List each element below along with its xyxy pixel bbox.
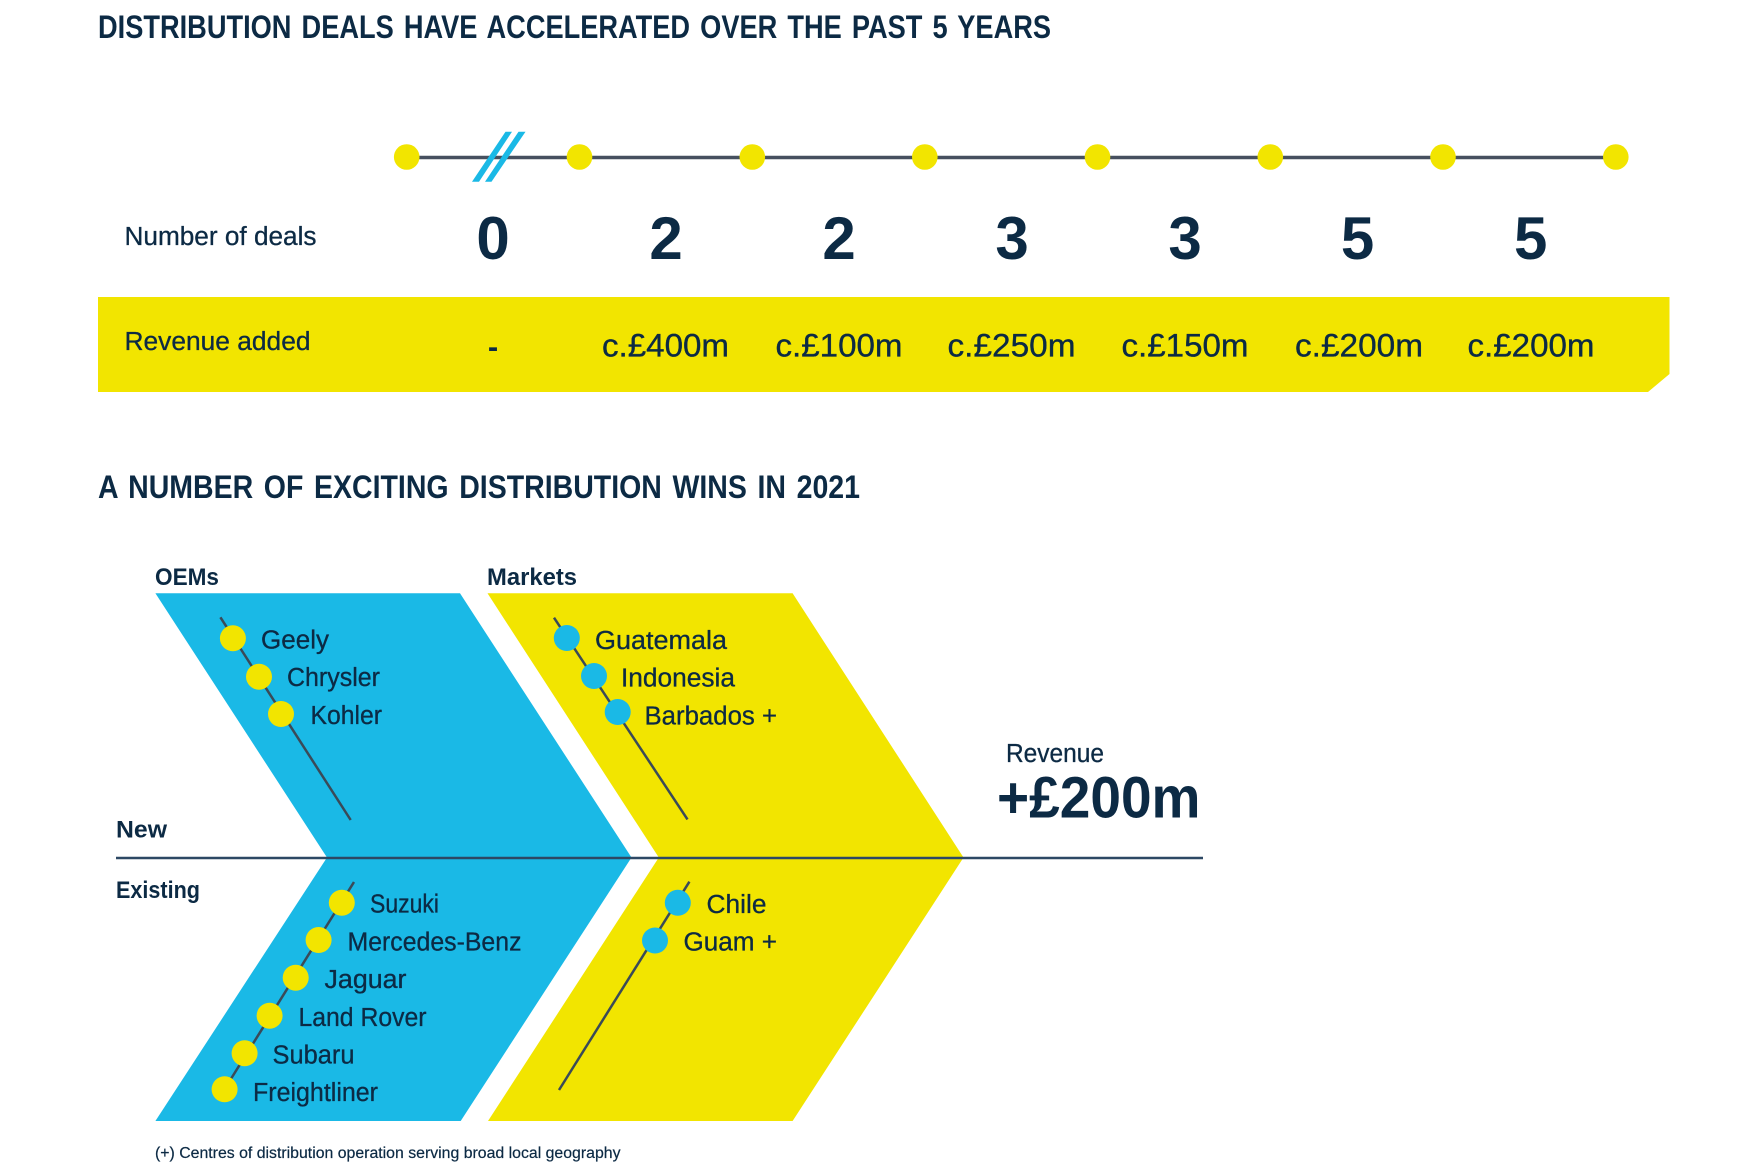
- panel: OEMs chevron: [155, 593, 632, 1121]
- list: existing OEMs: Jaguar: [324, 966, 407, 994]
- footnote: (+) Centres of distribution operation serving broad local geography: [155, 1145, 621, 1162]
- list: existing markets: [559, 882, 777, 1090]
- list: new OEMs: [220, 617, 382, 820]
- row: revenue added: [98, 297, 1670, 392]
- label: New: New: [116, 816, 168, 844]
- row: revenue added: -: [488, 329, 498, 364]
- panel: Markets chevron: [488, 593, 964, 1121]
- row: number of deals: 5: [1341, 205, 1374, 272]
- label: Existing: Existing: [116, 877, 200, 904]
- list: existing markets: Chile: [706, 891, 766, 919]
- row: number of deals: 3: [995, 205, 1029, 272]
- list: existing OEMs: Land Rover: [298, 1004, 427, 1032]
- list: new markets: Barbados +: [644, 702, 777, 730]
- list: existing OEMs: Suzuki: [370, 890, 439, 918]
- list: existing OEMs: Freightliner: [253, 1079, 378, 1107]
- list: new markets: Indonesia: [621, 665, 736, 693]
- list: new OEMs: Geely: [261, 626, 329, 654]
- list: new markets: Guatemala: [595, 627, 728, 655]
- list: existing OEMs: Mercedes-Benz: [348, 928, 522, 956]
- list: new OEMs: Kohler: [310, 702, 382, 730]
- title: distribution deals: DISTRIBUTION DEALS HAVE ACCELERATED OVER THE PAST 5 YEARS: [98, 9, 1051, 45]
- list: existing markets: Guam +: [684, 928, 777, 956]
- list: existing OEMs: Subaru: [272, 1042, 354, 1070]
- row: number of deals: 5: [1514, 205, 1547, 272]
- row: revenue added: c.£250m: [948, 328, 1076, 364]
- row: number of deals: [124, 205, 1547, 272]
- row: number of deals: 2: [822, 205, 856, 272]
- row: number of deals: 2: [649, 205, 683, 272]
- row: number of deals: 0: [476, 205, 510, 272]
- callout: revenue: [997, 740, 1200, 830]
- row: revenue added: Revenue added: [124, 328, 310, 356]
- row: revenue added: c.£200m: [1295, 328, 1423, 364]
- list: new OEMs: Chrysler: [287, 664, 380, 692]
- heading: Markets: Markets: [487, 564, 577, 591]
- row: revenue added: c.£200m: [1468, 328, 1594, 364]
- axis line: [116, 857, 1203, 859]
- timeline: [394, 132, 1629, 182]
- heading: OEMs: OEMs: [155, 564, 219, 591]
- title: distribution wins: A NUMBER OF EXCITING DISTRIBUTION WINS IN 2021: [98, 469, 860, 505]
- callout: revenue: Revenue: [1006, 740, 1104, 768]
- row: revenue added: c.£100m: [776, 328, 902, 364]
- row: number of deals: Number of deals: [124, 223, 316, 251]
- row: revenue added: c.£400m: [602, 328, 729, 364]
- list: new markets: [554, 618, 777, 819]
- callout: revenue: +£200m: [997, 766, 1200, 830]
- row: revenue added: c.£150m: [1122, 328, 1248, 364]
- list: existing OEMs: [212, 882, 522, 1107]
- row: number of deals: 3: [1168, 205, 1202, 272]
- icon: axis break slashes: [472, 132, 526, 182]
